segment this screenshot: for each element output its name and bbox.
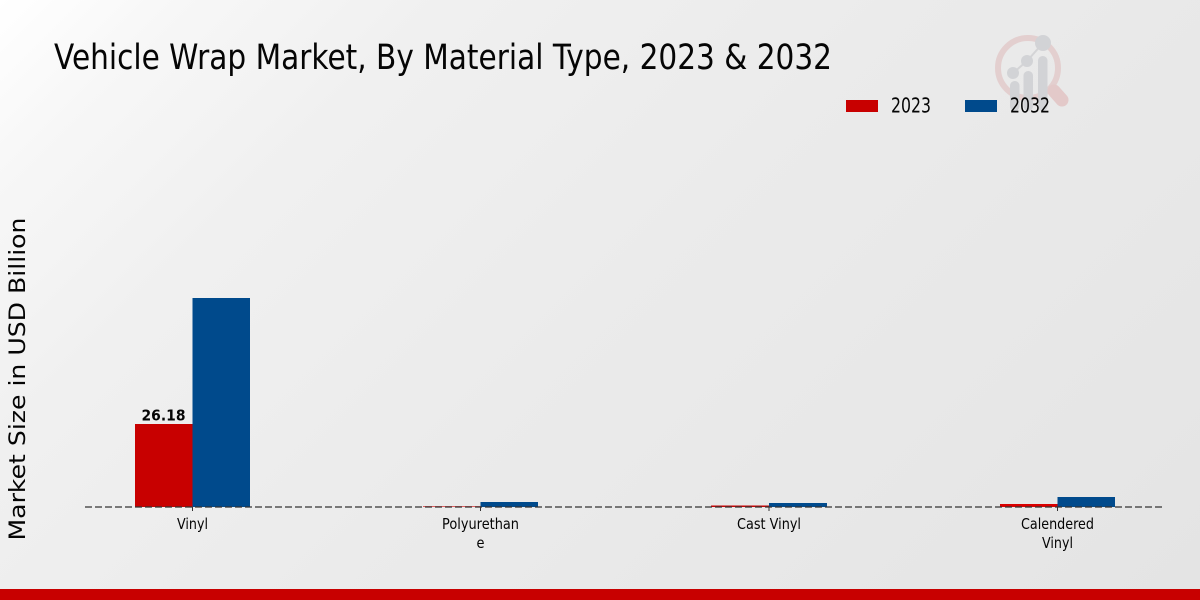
footer bar — [0, 589, 1200, 600]
legend label: 2032: 2032 — [1010, 94, 1050, 118]
legend swatch: 2023 — [846, 100, 878, 112]
category label: Polyurethane — [442, 515, 519, 552]
baseline — [85, 506, 1164, 508]
legend swatch: 2032 — [965, 100, 997, 112]
category label: Calendered Vinyl — [1021, 515, 1094, 552]
y axis label: Market Size in USD Billion — [5, 218, 31, 540]
category label: Calendered Vinyl: Calendered — [1021, 515, 1094, 533]
bar chart — [85, 298, 1164, 552]
category label: Cast Vinyl: Cast Vinyl — [737, 515, 801, 533]
title: Vehicle Wrap Market, By Material Type, 2023 & 2032 — [54, 38, 832, 78]
value label: 26.18: 26.18 — [142, 406, 186, 424]
legend — [846, 94, 1050, 118]
legend label: 2023: 2023 — [891, 94, 931, 118]
category label: Calendered Vinyl: Vinyl — [1042, 534, 1073, 552]
bars: Vinyl — [135, 298, 250, 507]
category label: Polyurethane: e — [476, 534, 484, 552]
watermark logo — [998, 35, 1062, 111]
category label: Vinyl: Vinyl — [177, 515, 208, 533]
bars: Calendered Vinyl — [1000, 497, 1115, 507]
category label: Polyurethane: Polyurethan — [442, 515, 519, 533]
bars: Polyurethane — [423, 502, 538, 507]
bars: Cast Vinyl — [711, 503, 827, 507]
